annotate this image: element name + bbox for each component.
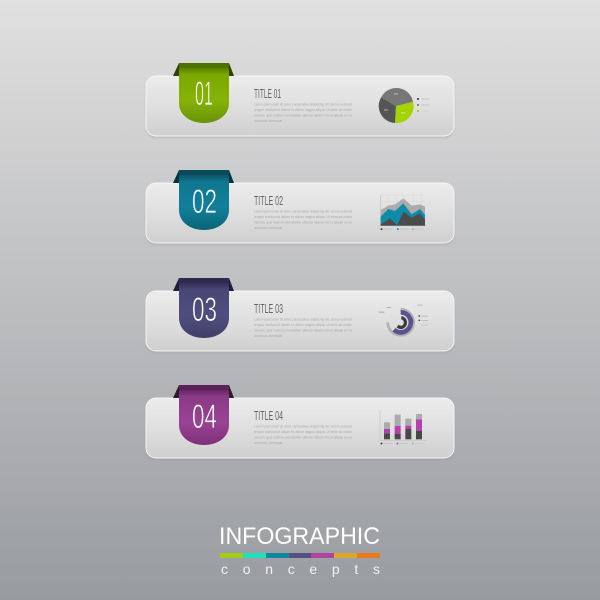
text block 02: veniam, quis nostrud exercitation ullamco laboris nisi ut aliquip ex ea	[254, 220, 353, 224]
text block 03	[254, 316, 353, 338]
title 02: TITLE 02	[254, 194, 283, 208]
panel: item 02	[146, 170, 454, 244]
bar chart	[380, 409, 427, 444]
text block 03: Lorem ipsum dolor sit amet, consectetuer adipiscing elit, sed do euismod	[254, 316, 352, 322]
number 03: 03	[192, 291, 217, 329]
panel: item 04	[146, 385, 454, 460]
text block 01: veniam, quis nostrud exercitation ullamco laboris nisi ut aliquip ex ea	[254, 112, 353, 118]
text block 04: veniam, quis nostrud exercitation ullamco laboris nisi ut aliquip ex ea	[254, 434, 353, 440]
text block 02	[254, 208, 353, 230]
area chart	[381, 195, 426, 230]
text block 01: tempor incidunt ut labore et dolore magna aliqua. Ut enim ad minim	[254, 107, 353, 112]
title 01: TITLE 01	[254, 87, 281, 101]
legend	[417, 98, 429, 112]
text block 02: Lorem ipsum dolor sit amet, consectetuer adipiscing elit, sed do euismod	[254, 208, 352, 214]
card 04	[146, 398, 454, 460]
legend	[381, 228, 424, 230]
pie chart: 8%	[384, 108, 389, 112]
card 03	[146, 291, 454, 352]
text block 04: commodo consequat.	[254, 440, 283, 445]
legend	[381, 443, 424, 444]
legend	[418, 315, 428, 326]
colour strip	[220, 553, 380, 558]
ribbon 03	[173, 278, 234, 338]
text block 02: tempor incidunt ut labore et dolore magna aliqua. Ut enim ad minim	[254, 214, 353, 219]
pie chart: 8%	[394, 92, 399, 96]
pie chart: 5%	[401, 111, 406, 115]
pie chart	[379, 88, 429, 123]
ribbon 01: 01	[195, 75, 213, 113]
text block 04: Lorem ipsum dolor sit amet, consectetuer adipiscing elit, sed do euismod	[254, 424, 352, 428]
text block 02: commodo consequat.	[254, 225, 283, 230]
title 03: TITLE 03	[254, 302, 283, 316]
title 04: TITLE 04	[254, 409, 283, 423]
text block 03: veniam, quis nostrud exercitation ullamco laboris nisi ut aliquip ex ea	[254, 328, 353, 332]
card 02	[146, 183, 454, 244]
text block 01: Lorem ipsum dolor sit amet, consectetuer adipiscing elit, sed do euismod	[254, 102, 352, 106]
heading: INFOGRAPHIC: INFOGRAPHIC	[219, 523, 380, 550]
number 02: 02	[192, 183, 217, 221]
text block 04: tempor incidunt ut labore et dolore magna aliqua. Ut enim ad minim	[254, 429, 353, 434]
subheading: concepts: concepts	[221, 561, 380, 577]
ribbon 01	[173, 63, 234, 123]
ribbon 04	[173, 385, 234, 445]
ribbon 02	[173, 170, 234, 230]
text block 01	[254, 102, 353, 123]
text block 03: tempor incidunt ut labore et dolore magna aliqua. Ut enim ad minim	[254, 322, 353, 327]
number 04: 04	[192, 398, 217, 436]
text block 01: commodo consequat.	[254, 118, 283, 123]
donut chart	[379, 305, 428, 335]
panel: item 01	[146, 63, 454, 138]
text block 04	[254, 424, 353, 445]
text block 03: commodo consequat.	[254, 333, 283, 338]
card 01	[146, 76, 454, 138]
panel: item 03	[146, 278, 454, 352]
